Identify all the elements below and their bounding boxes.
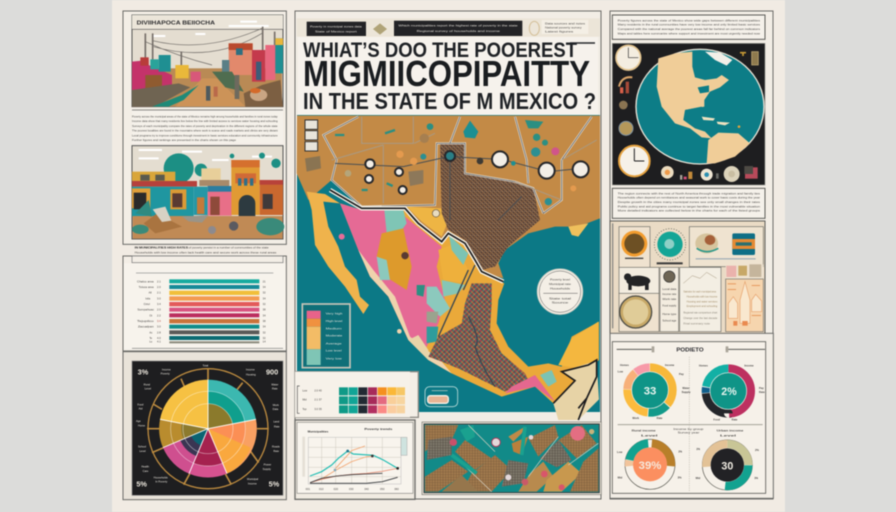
donut: 39%: 3% xyxy=(678,475,682,479)
donut: 33: Work xyxy=(632,416,639,420)
patchwork blocks xyxy=(425,425,598,492)
bar labels: 34 xyxy=(263,325,266,329)
donut: 2%: Food xyxy=(713,417,720,421)
bar labels: 34 xyxy=(263,313,266,317)
donut: 33: Homes xyxy=(620,363,629,367)
panel: left column top xyxy=(123,11,286,259)
text box: top note: Many residents in the rural communities have very low income and only limited basic services xyxy=(618,23,761,27)
x-axis labels: 010 xyxy=(319,487,324,491)
region: Central America xyxy=(553,360,599,420)
chart headings: Municipalities xyxy=(308,430,329,434)
document: small line chart and notes: Statistics for each municipal area xyxy=(683,289,716,293)
bar labels: 32 xyxy=(263,291,266,295)
header note: National poverty survey xyxy=(545,26,583,30)
pie callout labels: Age xyxy=(136,419,141,423)
text box: top note xyxy=(612,15,765,39)
bar labels: 4.1 xyxy=(157,340,161,344)
callout: circle note xyxy=(537,269,583,314)
document: medal text: Work rate xyxy=(662,297,677,301)
map: northern region xyxy=(297,116,600,278)
bar labels: Ot xyxy=(149,313,152,317)
pie callout labels: Level xyxy=(139,449,146,453)
bar labels: Zacualpan xyxy=(138,325,154,329)
text box: lower note: More detailed indicators are collected below in the charts for each of the listed groups xyxy=(618,209,761,213)
bar labels: Oztol xyxy=(144,302,150,306)
donut: 39%: Rural income xyxy=(632,429,656,433)
heading: donut panel: PODIETO xyxy=(676,348,704,354)
text box: top note: Compared with the national average the poorest areas fall far behind on common indicators xyxy=(618,27,761,31)
text block: intro paragraph: Poverty across the municipal areas of the state of Mexico remains high among households and families in rural zones today xyxy=(132,114,278,118)
x-axis labels: 030 xyxy=(349,487,354,491)
donut: 30: 3% xyxy=(754,476,759,480)
donut: 39% xyxy=(617,429,683,489)
corner values: 5% xyxy=(269,480,280,489)
text box: lower note xyxy=(612,188,765,218)
bar labels: 34 xyxy=(263,285,266,289)
donut: 30: Urban income xyxy=(717,429,744,433)
icon: emblem xyxy=(529,21,539,35)
plot area xyxy=(302,437,407,484)
panel: black globe panel xyxy=(612,43,765,185)
header tag: left xyxy=(307,22,366,36)
map legend: Medium xyxy=(326,326,343,330)
panel: radial pie chart xyxy=(123,352,286,500)
donut: 30: 30 xyxy=(721,460,733,472)
panel: patchwork street map xyxy=(422,422,601,495)
pie callout labels: Rural xyxy=(144,382,150,386)
text block: second paragraph xyxy=(135,245,277,259)
table labels: 2.1 37 xyxy=(314,398,322,402)
x-axis labels: 060 xyxy=(394,487,399,491)
bar labels: 3.0 xyxy=(157,325,161,329)
corner values: 900 xyxy=(266,368,278,377)
pie callout labels: School xyxy=(138,445,147,449)
bar labels: Toluca area xyxy=(139,285,154,289)
map legend: Very high xyxy=(326,311,343,315)
pie callout labels: Work xyxy=(273,403,279,407)
pie callout labels: Rate xyxy=(274,424,280,428)
text box: top note: Poverty figures across the state of Mexico show wide gaps between different municipalities xyxy=(618,18,761,22)
donut: 30: Level xyxy=(720,433,737,437)
border: US-Mexico line xyxy=(330,190,503,282)
map legend: Average xyxy=(326,341,342,345)
map legend: Moderate xyxy=(326,334,343,338)
text box: lower note: Despite growth in the cities many municipal zones see only small changes in their rates xyxy=(618,200,761,204)
document: small line chart and notes: Final summary note xyxy=(683,321,711,325)
bar labels: 4.0 xyxy=(157,336,161,340)
title: MIGMIICOPIPAITTY xyxy=(303,53,590,94)
icon: large clock xyxy=(619,146,650,176)
bar labels: 2.2 xyxy=(157,313,161,317)
donut: 2%: 2% xyxy=(721,386,737,398)
text block: intro paragraph: Surveys of each municipality compare the rates of poverty and deprivation in the different regions of the whole state xyxy=(132,124,278,128)
side band: right xyxy=(785,0,896,512)
text block: second paragraph: Households with low income often lack health care and secure work across these rural areas xyxy=(135,250,277,254)
title: WHIAT’S DOO THE POOEREST xyxy=(303,39,577,62)
bar labels: Ac xyxy=(149,330,153,334)
caption: center note: Income by group xyxy=(673,427,704,431)
text block: intro paragraph: Local programs try to improve conditions through investment in basic services education and community infrastructure xyxy=(132,133,278,137)
title: IN THE STATE OF M MEXICO ? xyxy=(303,88,596,114)
text box: lower note: Households often depend on remittances and seasonal work to cover basic costs during the year xyxy=(618,196,760,200)
panel: colour table xyxy=(295,372,418,417)
document: small line chart and notes: Employment and schooling xyxy=(687,304,718,308)
pie callout labels: Power xyxy=(264,462,271,466)
pie callout labels: Municipal xyxy=(247,477,259,481)
text box: lower note: The region connects with the rest of North America through trade migration and family ties xyxy=(618,191,761,195)
pie callout labels: Rate xyxy=(272,386,278,390)
corner values: 3% xyxy=(138,368,149,377)
donut: 2%: Rate xyxy=(732,417,738,421)
text block: second paragraph: of poverty persist in a number of communities of the state xyxy=(189,245,269,249)
panel: main map xyxy=(297,115,600,420)
title xyxy=(298,37,598,115)
donut: 2%: Pay xyxy=(759,386,764,390)
pie callout labels: Supply xyxy=(263,467,271,471)
bar labels: 34 xyxy=(263,296,266,300)
illustration: poor street scene xyxy=(132,15,283,107)
map legend: Low level xyxy=(326,349,342,353)
table labels: 2.0 40 xyxy=(314,388,322,392)
donut: 2%: Rate xyxy=(759,390,765,394)
donut: 33 xyxy=(618,363,684,420)
paper background xyxy=(112,0,785,512)
icon: gold diamond xyxy=(373,23,387,35)
panel: line chart xyxy=(295,420,415,499)
icon: round seal xyxy=(619,293,659,332)
bar labels: 14 xyxy=(263,340,266,344)
icon: top right marks xyxy=(740,52,758,65)
pie callout labels: Level xyxy=(145,386,151,390)
table labels xyxy=(302,388,322,411)
header tag: left: State of Mexico report xyxy=(315,29,357,33)
caption: center note: Survey year xyxy=(678,431,699,435)
donut: 30 xyxy=(696,429,759,490)
icon: wall clock xyxy=(616,45,641,70)
document: stamps and peach sheet xyxy=(726,264,763,332)
pie callout labels: Poverty xyxy=(161,372,170,376)
donut: 39%: Level xyxy=(641,433,658,437)
text box: top note: Maps and tables here summarize where support and investment are most urgently needed now xyxy=(618,32,760,36)
donut: 2%: Water xyxy=(682,386,690,390)
map legend xyxy=(302,304,350,368)
pie callout labels: Aid xyxy=(139,406,143,410)
header note xyxy=(542,20,588,34)
text box: lower note: Public policy and aid programs continue to target families in the most vulnerable situation xyxy=(618,204,761,208)
donut: 33: Low xyxy=(618,370,624,374)
bar labels: 2.0 xyxy=(157,285,161,289)
bar labels: 2.8 xyxy=(157,330,161,334)
scale badge xyxy=(425,387,458,407)
caption: center note xyxy=(673,427,704,435)
donut: 39%: Mid xyxy=(618,475,623,479)
pie callout labels: Water xyxy=(271,382,278,386)
map legend: High level xyxy=(326,319,343,323)
chart headings xyxy=(308,427,393,434)
document: small line chart and notes: Regional rate comparison chart xyxy=(683,310,718,314)
x-axis labels xyxy=(306,487,399,491)
donut: 30: 2% xyxy=(696,447,701,451)
donut: 30: Mid xyxy=(696,476,701,480)
bar labels: Sumpahuac xyxy=(137,308,155,312)
map: Mexico xyxy=(302,190,599,420)
corner values: 5% xyxy=(136,480,147,489)
pie callout labels: Housing xyxy=(246,372,256,376)
pie sectors xyxy=(147,369,269,489)
donut: 39%: Low xyxy=(617,450,623,454)
document: medal text: School age xyxy=(662,319,677,323)
emblem: crest and badge xyxy=(689,227,763,267)
x-axis labels: 050 xyxy=(380,487,385,491)
map legend: Very low xyxy=(326,356,342,360)
document: medal text: Income rate xyxy=(662,292,677,296)
bar labels: Tejupilco xyxy=(137,319,154,323)
bar labels: Chalco area xyxy=(137,279,154,283)
corner values xyxy=(136,368,280,489)
side band: left xyxy=(0,0,112,512)
bar labels: 3.4 xyxy=(157,302,161,306)
x-axis labels: 020 xyxy=(334,487,339,491)
pie callout labels: Care xyxy=(143,469,149,473)
document: medal text: Home type xyxy=(662,312,677,316)
donut: 39%: 39% xyxy=(639,460,661,472)
bar labels: All xyxy=(149,291,152,295)
pie callout labels: Land xyxy=(273,420,280,424)
icon: small gauge xyxy=(619,77,632,93)
header tag: center: Regional survey of households and income xyxy=(417,29,501,33)
header tag: center xyxy=(394,21,522,36)
donut: 33: Income xyxy=(665,363,675,367)
document: small line chart and notes: Change over the last decade xyxy=(683,316,718,320)
table labels: Top xyxy=(302,407,307,411)
pie callout labels: Health xyxy=(141,465,150,469)
panel: donut charts xyxy=(610,333,773,498)
bar labels: 32 xyxy=(263,330,266,334)
pie callout labels: Income xyxy=(246,368,255,372)
icon: coin xyxy=(619,121,633,135)
text block: second paragraph: IN MUNICIPALITIES HIGH RATES xyxy=(135,245,188,249)
donut: 2%: Supply xyxy=(682,390,691,394)
illustration: town buildings xyxy=(132,146,284,239)
bar labels xyxy=(137,279,266,344)
bar labels: 38 xyxy=(263,319,266,323)
bar labels: 21 xyxy=(263,279,266,283)
callout: circle note: State total xyxy=(549,296,572,300)
header strip xyxy=(297,18,600,37)
bar labels: 2.1 xyxy=(157,291,161,295)
donut: 2%: Homes xyxy=(699,363,708,367)
pie callout labels: Rate xyxy=(273,449,279,453)
chart headings: Poverty trends xyxy=(364,427,393,431)
bar labels: 2.1 xyxy=(157,279,161,283)
donut: 2%: Income xyxy=(744,363,754,367)
heading: scene title: DIVIIHAPOCA BEIIOCHA xyxy=(137,21,215,27)
pie callout labels xyxy=(136,363,280,486)
pie callout labels: In Poverty xyxy=(155,480,168,484)
donut: 33: Rate xyxy=(657,416,663,420)
header note: Data sources and notes xyxy=(545,22,586,26)
bar labels: 38 xyxy=(263,308,266,312)
text block: intro paragraph: Further figures and rankings are presented in the charts shown on this page xyxy=(132,138,237,142)
globe xyxy=(635,49,765,165)
pie callout labels: Income xyxy=(248,482,257,486)
bar labels: 32 xyxy=(263,336,266,340)
map markers xyxy=(365,151,589,194)
pie callout labels: Data xyxy=(273,407,279,411)
pie callout labels: Food xyxy=(137,402,144,406)
document: small line chart and notes xyxy=(680,267,721,332)
text block: intro paragraph xyxy=(132,110,283,143)
document: small line chart and notes: Households with low income xyxy=(687,295,718,299)
pie callout labels: Total xyxy=(203,363,209,367)
pie callout labels: Income xyxy=(162,368,171,372)
panel: center column frame xyxy=(295,11,601,499)
header tag: center: Which municipalities report the highest rate of poverty in the state xyxy=(398,24,518,28)
panel: documents and emblems xyxy=(610,221,765,338)
pie callout labels: Home xyxy=(138,424,146,428)
colour grid xyxy=(339,387,405,413)
document: medal text: Food supply xyxy=(662,304,677,308)
document: small line chart and notes: Housing and water services xyxy=(687,299,718,303)
bar labels: 3.4 xyxy=(157,319,161,323)
text block: intro paragraph: The poorest localities are found in the mountains where work is scarce and roads markets and clinics are very distant xyxy=(132,129,278,133)
document: medal text: Local data xyxy=(662,287,677,291)
text block: intro paragraph: Income data show that many residents live below the line with limited access to services water housing and schooling xyxy=(132,119,278,123)
small islands xyxy=(339,223,588,334)
emblem: teal disc xyxy=(654,229,686,264)
x-axis labels: 001 xyxy=(306,487,311,491)
header tag: left: Poverty in municipal zones data xyxy=(310,24,362,28)
bar labels: 32 xyxy=(263,302,266,306)
region: mainland Mexico xyxy=(340,203,599,403)
callout: circle note: Households xyxy=(550,286,571,290)
callout: circle note: Poverty level xyxy=(550,278,571,282)
bar labels: Ixtla xyxy=(145,296,151,300)
donut: 30: 2% xyxy=(755,448,759,452)
panel: right column frame xyxy=(610,11,773,499)
bar labels: Lu xyxy=(149,340,153,344)
callout: circle note: Municipal rate xyxy=(549,282,572,286)
icon: lamp xyxy=(619,101,628,109)
callout: circle note: Source xyxy=(552,300,569,304)
table labels: Mid xyxy=(302,398,307,402)
table labels: 3.0 35 xyxy=(314,407,322,411)
header note: Latest figures xyxy=(545,29,575,33)
map location icons xyxy=(305,120,576,205)
donut: 33: 33 xyxy=(644,385,656,397)
text block: second paragraph: The following chart lists the proportion of residents in poverty for each of the municipalities xyxy=(135,255,277,259)
bar labels: 2.0 xyxy=(157,308,161,312)
donut: 2% xyxy=(682,363,765,421)
panel: horizontal bar chart xyxy=(123,256,286,351)
x-axis labels: 040 xyxy=(364,487,369,491)
bar labels: Te xyxy=(149,336,153,340)
pie callout labels: Households xyxy=(154,476,168,480)
icon: medals row xyxy=(661,166,758,182)
table labels: Low xyxy=(302,388,307,392)
pie callout labels: Roads xyxy=(272,445,280,449)
donut: 33: Pay xyxy=(679,372,684,376)
emblem: ring coin xyxy=(619,227,650,267)
bar labels: 3.0 xyxy=(157,296,161,300)
icon: bear xyxy=(619,267,659,293)
region: Baja California xyxy=(307,192,369,314)
bars xyxy=(169,279,259,343)
document: medal text xyxy=(660,267,679,332)
panel: globe and top text xyxy=(612,15,765,218)
donut: 39%: 2% xyxy=(678,449,683,453)
